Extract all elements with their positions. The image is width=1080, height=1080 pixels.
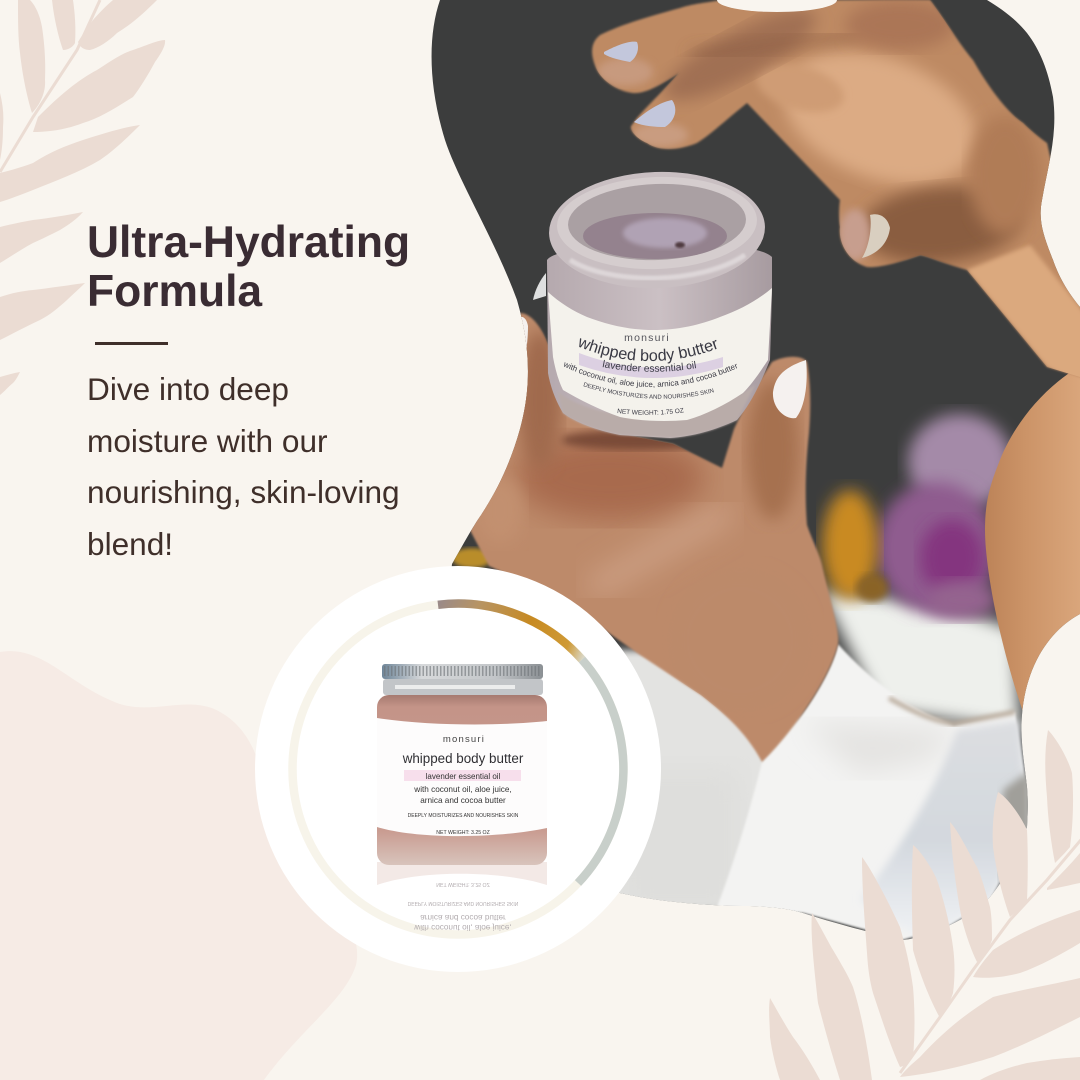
jar label highlight band [579,353,723,378]
product jar: monsuri [443,734,485,745]
product jar: with coconut oil, aloe juice, [413,785,512,794]
body text: blend! [87,526,173,562]
product jar: NET WEIGHT: 3.25 OZ [436,830,490,836]
gold flower corner [452,548,492,568]
jar label text: with coconut oil, aloe juice, arnica and cocoa butter [564,362,737,388]
small cream blob: top [717,0,837,12]
reflected label text: arnica and cocoa butter [420,913,506,922]
product jar: arnica and cocoa butter [420,796,506,805]
jar label [548,288,772,421]
jar label [377,718,547,836]
jar label text: whipped body butter [579,338,717,364]
badge ring [292,604,624,934]
background blob: lower left [0,651,357,1080]
lower hand [470,273,838,762]
blurred tabletop [600,590,1020,910]
white fingernails [773,360,807,418]
divider [95,342,168,345]
photo: hands holding a jar [432,0,1080,940]
body text: nourishing, skin-loving [87,474,400,510]
reflected label text [408,881,519,932]
product jar: lavender essential oil [426,772,501,781]
reflected label text: DEEPLY MOISTURIZES AND NOURISHES SKIN [408,900,519,906]
white sleeve [717,644,1030,940]
body text: Dive into deep [87,371,289,407]
jar label text: DEEPLY MOISTURIZES AND NOURISHES SKIN [584,382,714,399]
product jar [377,664,547,932]
circular product badge [255,566,661,972]
blurred flowers [822,414,1012,620]
reflected label text: with coconut oil, aloe juice, [413,923,512,932]
jar bottom glass [558,385,755,438]
jar label text: lavender essential oil [602,360,696,372]
jar rim [549,172,765,284]
fingernail: middle [634,100,675,127]
fingernail: index [604,42,638,62]
product jar: DEEPLY MOISTURIZES AND NOURISHES SKIN [408,813,519,819]
heading: Ultra-Hydrating [87,218,410,267]
body text [87,371,400,562]
jar reflection [377,862,547,885]
heading: Formula [87,267,262,316]
upper hand [592,0,1080,390]
jar label text [564,334,737,415]
photo jar [547,172,772,440]
leaf branch: bottom right [769,730,1080,1080]
heading [87,218,410,316]
product jar: whipped body butter [402,751,524,766]
leaf branch: top left [0,0,165,395]
dark background [420,0,1080,950]
jar label text: monsuri [624,332,670,344]
jar lid [382,664,543,679]
jar label text: NET WEIGHT: 1.75 OZ [618,408,684,415]
body text: moisture with our [87,422,328,458]
reflected label text: NET WEIGHT: 3.25 OZ [436,881,490,887]
forearm right [985,374,1080,710]
fingernail: thumb [862,214,890,258]
